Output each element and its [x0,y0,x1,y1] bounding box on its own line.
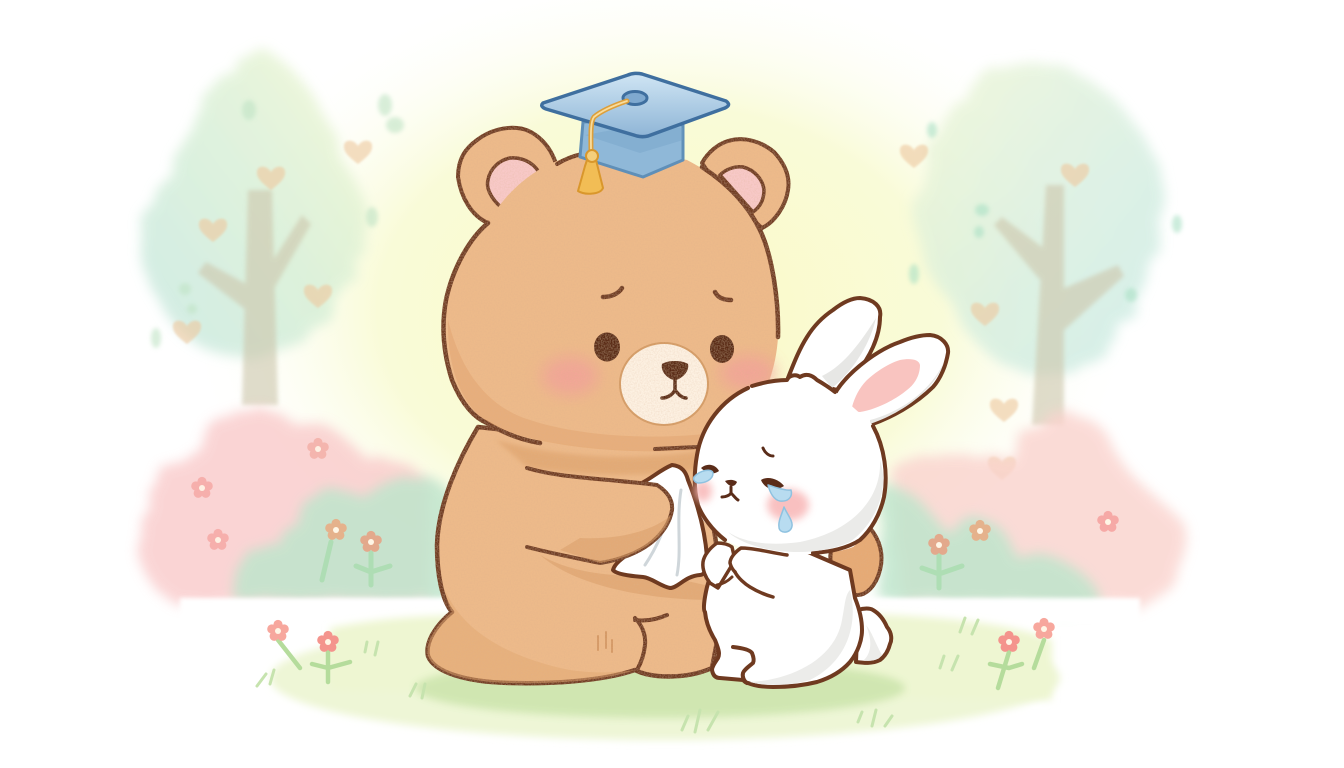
background glow [190,0,1130,650]
tassel [578,101,627,194]
right bushes [880,413,1187,612]
bunny front ear [820,335,948,425]
bunny eyes [701,465,784,489]
bear muzzle [620,343,708,425]
bunny [694,298,948,687]
bear eyebrows [603,288,731,300]
ground flowers [267,618,1055,688]
graduation cap [542,73,729,194]
handkerchief [613,465,707,588]
bunny body [704,540,862,687]
bear left arm [527,468,672,563]
bear right ear [702,139,788,228]
bunny tears [694,470,792,532]
bunny tail [856,608,891,663]
bear eyes [594,332,734,363]
left tree [140,48,404,405]
ground [180,598,1140,740]
bear left ear [458,128,557,223]
bear head [444,150,778,451]
bunny eyebrow [763,448,773,456]
bunny head [694,375,886,554]
left bushes [138,407,455,605]
bear right arm behind bunny [830,528,882,595]
bear blush [542,356,776,395]
bear [428,128,882,683]
bunny nose and mouth [722,480,738,500]
bunny blush [694,480,809,521]
bunny paws [703,543,790,597]
right tree [900,61,1182,480]
bunny back ear [788,298,880,390]
bear body [428,427,725,683]
